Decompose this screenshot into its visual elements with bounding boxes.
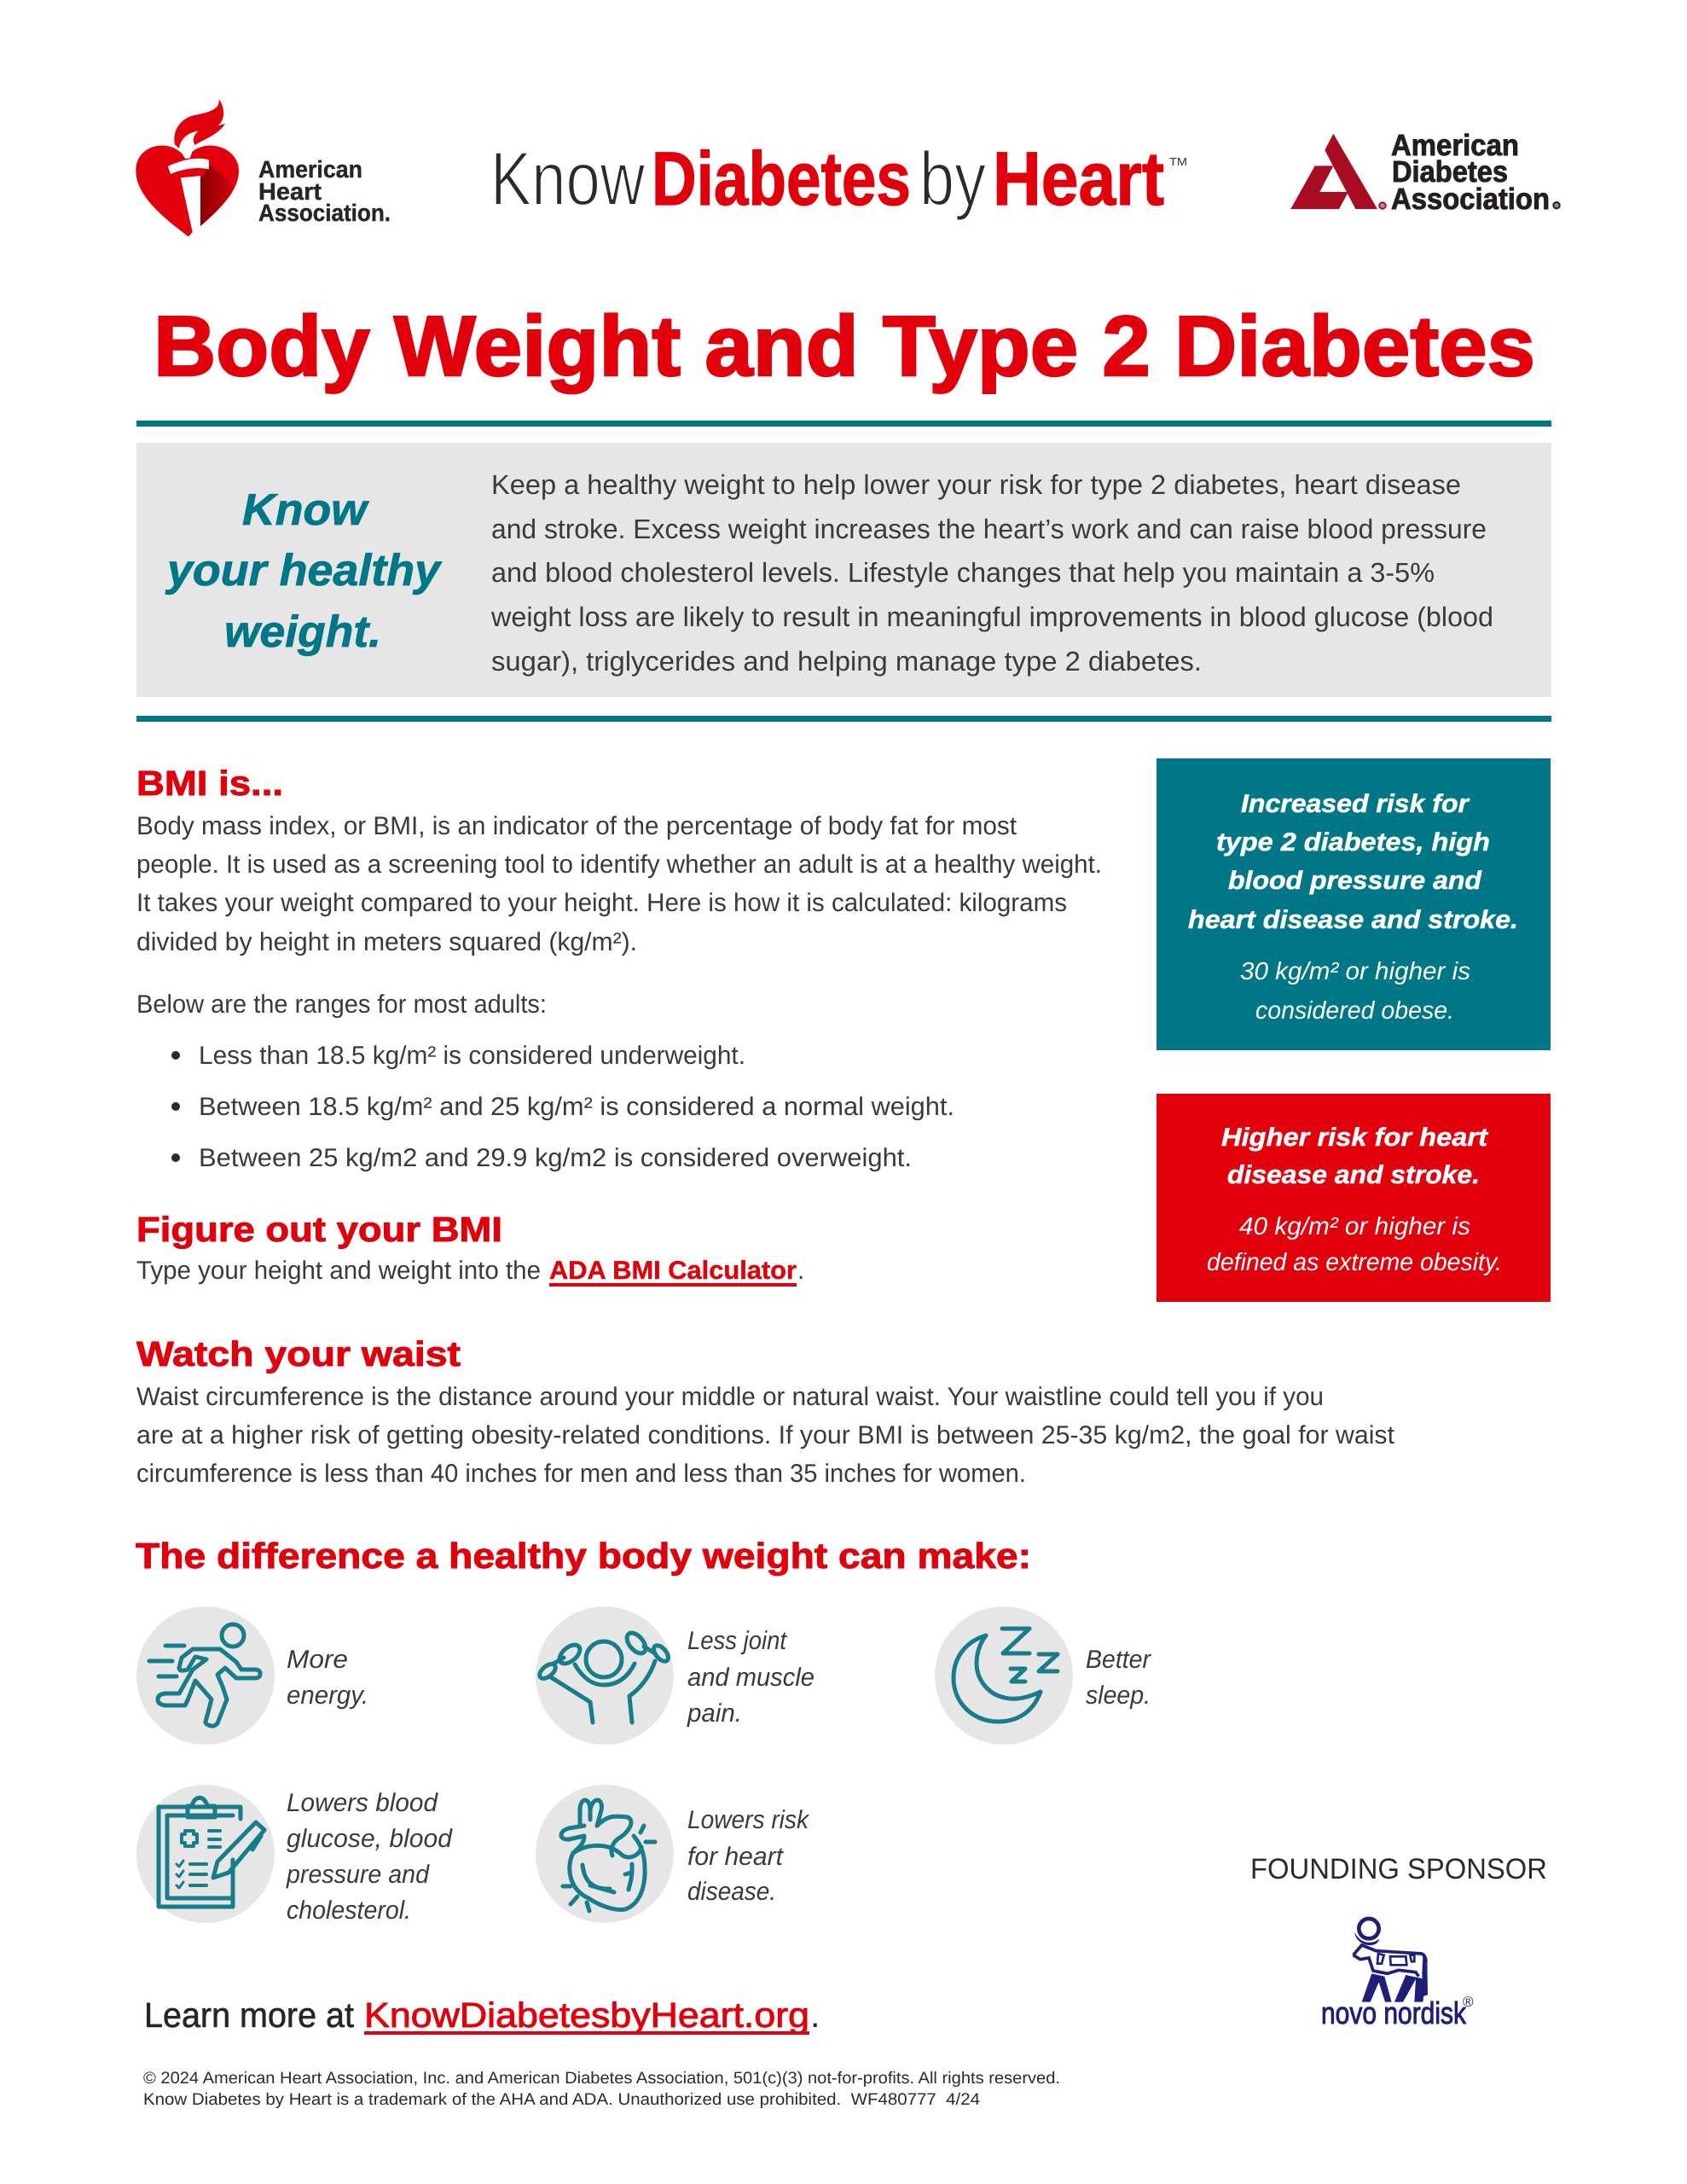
benefit: less joint and muscle pain: and muscle (687, 1664, 815, 1692)
benefit: more energy: energy. (287, 1682, 368, 1710)
callout heading: weight. (224, 607, 381, 657)
intro text: Keep a healthy weight to help lower your risk for type 2 diabetes, heart disease (491, 469, 1461, 500)
icon: runner (149, 1624, 260, 1726)
benefit: lowers risk for heart disease (536, 1785, 810, 1923)
logo: American Heart Association (136, 99, 391, 236)
logo: American Heart Association: American (258, 156, 362, 183)
text block: BMI definition (136, 812, 1102, 956)
icon: person lifting dumbbell (537, 1629, 671, 1722)
logo: Know Diabetes by Heart: Diabetes (652, 136, 911, 221)
copyright: © 2024 American Heart Association, Inc. and American Diabetes Association, 501(c)(3) not-for-profits. All rights reserved. (143, 2069, 1060, 2088)
logo: Know Diabetes by Heart (490, 136, 1187, 221)
text block: BMI definition: It takes your weight compared to your height. Here is how it is calculated: kilograms (136, 889, 1067, 917)
intro text: sugar), triglycerides and helping manage type 2 diabetes. (491, 646, 1202, 677)
copyright (143, 2069, 1060, 2109)
logo: Know Diabetes by Heart: Know (490, 136, 646, 221)
text block: BMI definition: people. It is used as a screening tool to identify whether an adult is at a healthy weight. (136, 851, 1102, 879)
learn more line (144, 1995, 820, 2035)
text: calculator link: ADA BMI Calculator (549, 1257, 797, 1285)
title: Body Weight and Type 2 Diabetes (154, 299, 1535, 394)
logo: American Diabetes Association: Diabetes (1392, 155, 1508, 189)
logo: American Diabetes Association: Association (1391, 183, 1550, 216)
text block: waist: are at a higher risk of getting obesity-related conditions. If your BMI is between 25-35 kg/m2, the goal for waist (136, 1421, 1395, 1449)
benefit: lowers risk for heart disease: for heart (687, 1843, 785, 1871)
panel: obese risk (1157, 758, 1551, 1050)
callout heading: your healthy (165, 546, 443, 595)
panel: extreme obesity risk: disease and stroke. (1227, 1161, 1480, 1189)
callout heading: Know (242, 485, 370, 535)
bullet list: BMI ranges (171, 1042, 954, 1172)
learn more line: . (810, 1995, 820, 2035)
panel: obese risk: considered obese. (1255, 997, 1454, 1025)
benefit: lowers risk for heart disease: Lowers risk (687, 1806, 810, 1834)
panel: obese risk: type 2 diabetes, high (1216, 828, 1490, 857)
logo: American Diabetes Association: American (1391, 129, 1519, 162)
learn more line: Learn more at (144, 1995, 355, 2035)
text: calculator link: . (797, 1257, 804, 1285)
panel: know your healthy weight (136, 443, 1551, 697)
benefit: lowers risk for heart disease: disease. (687, 1878, 776, 1906)
heading: Figure out your BMI: Figure out your BMI (136, 1210, 502, 1249)
copyright: Know Diabetes by Heart is a trademark of the AHA and ADA. Unauthorized use prohibited. WF480777 4/24 (143, 2090, 980, 2109)
text: calculator link: Type your height and weight into the (136, 1257, 541, 1285)
panel: extreme obesity risk: 40 kg/m² or higher is (1239, 1213, 1470, 1240)
learn more line: KnowDiabetesbyHeart.org (364, 1995, 809, 2035)
heading: Watch your waist: Watch your waist (136, 1334, 461, 1374)
icon: anatomical heart (561, 1800, 655, 1911)
intro text: and stroke. Excess weight increases the heart’s work and can raise blood pressure (491, 514, 1487, 544)
logo: Know Diabetes by Heart: by (919, 136, 986, 221)
benefit: better sleep (935, 1606, 1151, 1745)
benefit: lowers glucose, pressure, cholesterol: glucose, blood (287, 1825, 453, 1853)
benefit: lowers glucose, pressure, cholesterol (136, 1785, 453, 1925)
logo: American Heart Association: Association. (258, 200, 391, 226)
panel: obese risk: blood pressure and (1228, 867, 1482, 895)
benefit: better sleep: Better (1086, 1646, 1151, 1674)
panel: obese risk: Increased risk for (1241, 790, 1470, 818)
benefit: less joint and muscle pain: pain. (687, 1699, 742, 1728)
intro text: weight loss are likely to result in meaningful improvements in blood glucose (blood (490, 601, 1493, 632)
benefit: lowers glucose, pressure, cholesterol: pressure and (286, 1861, 430, 1889)
benefit: less joint and muscle pain (536, 1606, 815, 1745)
icon: moon and Z (954, 1629, 1058, 1722)
callout heading (165, 485, 443, 657)
text: ranges intro: Below are the ranges for most adults: (136, 990, 547, 1019)
intro text (490, 469, 1493, 677)
founding sponsor label: FOUNDING SPONSOR (1250, 1853, 1547, 1885)
panel: extreme obesity risk (1157, 1094, 1551, 1302)
text block: waist: circumference is less than 40 inches for men and less than 35 inches for women. (136, 1460, 1026, 1488)
bullet list: BMI ranges: Between 25 kg/m2 and 29.9 kg/m2 is considered overweight. (199, 1144, 912, 1172)
heading: BMI is: BMI is... (136, 764, 283, 803)
text block: waist (136, 1383, 1395, 1488)
logo: American Diabetes Association (1290, 129, 1560, 216)
benefit: lowers glucose, pressure, cholesterol: cholesterol. (287, 1896, 411, 1925)
bullet list: BMI ranges: Between 18.5 kg/m² and 25 kg/m² is considered a normal weight. (199, 1093, 954, 1121)
panel: obese risk: 30 kg/m² or higher is (1240, 958, 1470, 985)
benefit: more energy: More (287, 1646, 348, 1674)
logo: novo nordisk: novo nordisk (1321, 1995, 1467, 2030)
heading: the difference: The difference a healthy body weight can make: (136, 1536, 1031, 1576)
logo: American Heart Association: Heart (258, 178, 322, 205)
text block: waist: Waist circumference is the distance around your middle or natural waist. Your waistline could tell you if you (136, 1383, 1324, 1411)
logo: novo nordisk (1321, 1919, 1474, 2030)
panel: extreme obesity risk: Higher risk for heart (1221, 1124, 1489, 1152)
text block: BMI definition: divided by height in meters squared (kg/m²). (136, 928, 637, 956)
benefit: lowers glucose, pressure, cholesterol: Lowers blood (287, 1789, 438, 1817)
text block: BMI definition: Body mass index, or BMI, is an indicator of the percentage of body fat for most (136, 812, 1017, 840)
intro text: and blood cholesterol levels. Lifestyle changes that help you maintain a 3-5% (491, 557, 1435, 588)
benefit: more energy (136, 1606, 368, 1745)
panel: extreme obesity risk: defined as extreme obesity. (1207, 1249, 1502, 1276)
logo: Know Diabetes by Heart: TM (1169, 155, 1187, 168)
icon: clipboard and pen (159, 1798, 264, 1907)
panel: obese risk: heart disease and stroke. (1188, 906, 1518, 934)
logo: Know Diabetes by Heart: Heart (993, 136, 1164, 221)
bullet list: BMI ranges: Less than 18.5 kg/m² is considered underweight. (199, 1042, 745, 1070)
text: calculator link (136, 1257, 804, 1287)
benefit: better sleep: sleep. (1086, 1682, 1151, 1710)
benefit: less joint and muscle pain: Less joint (687, 1627, 788, 1655)
logo: novo nordisk: ® (1463, 1994, 1474, 2010)
